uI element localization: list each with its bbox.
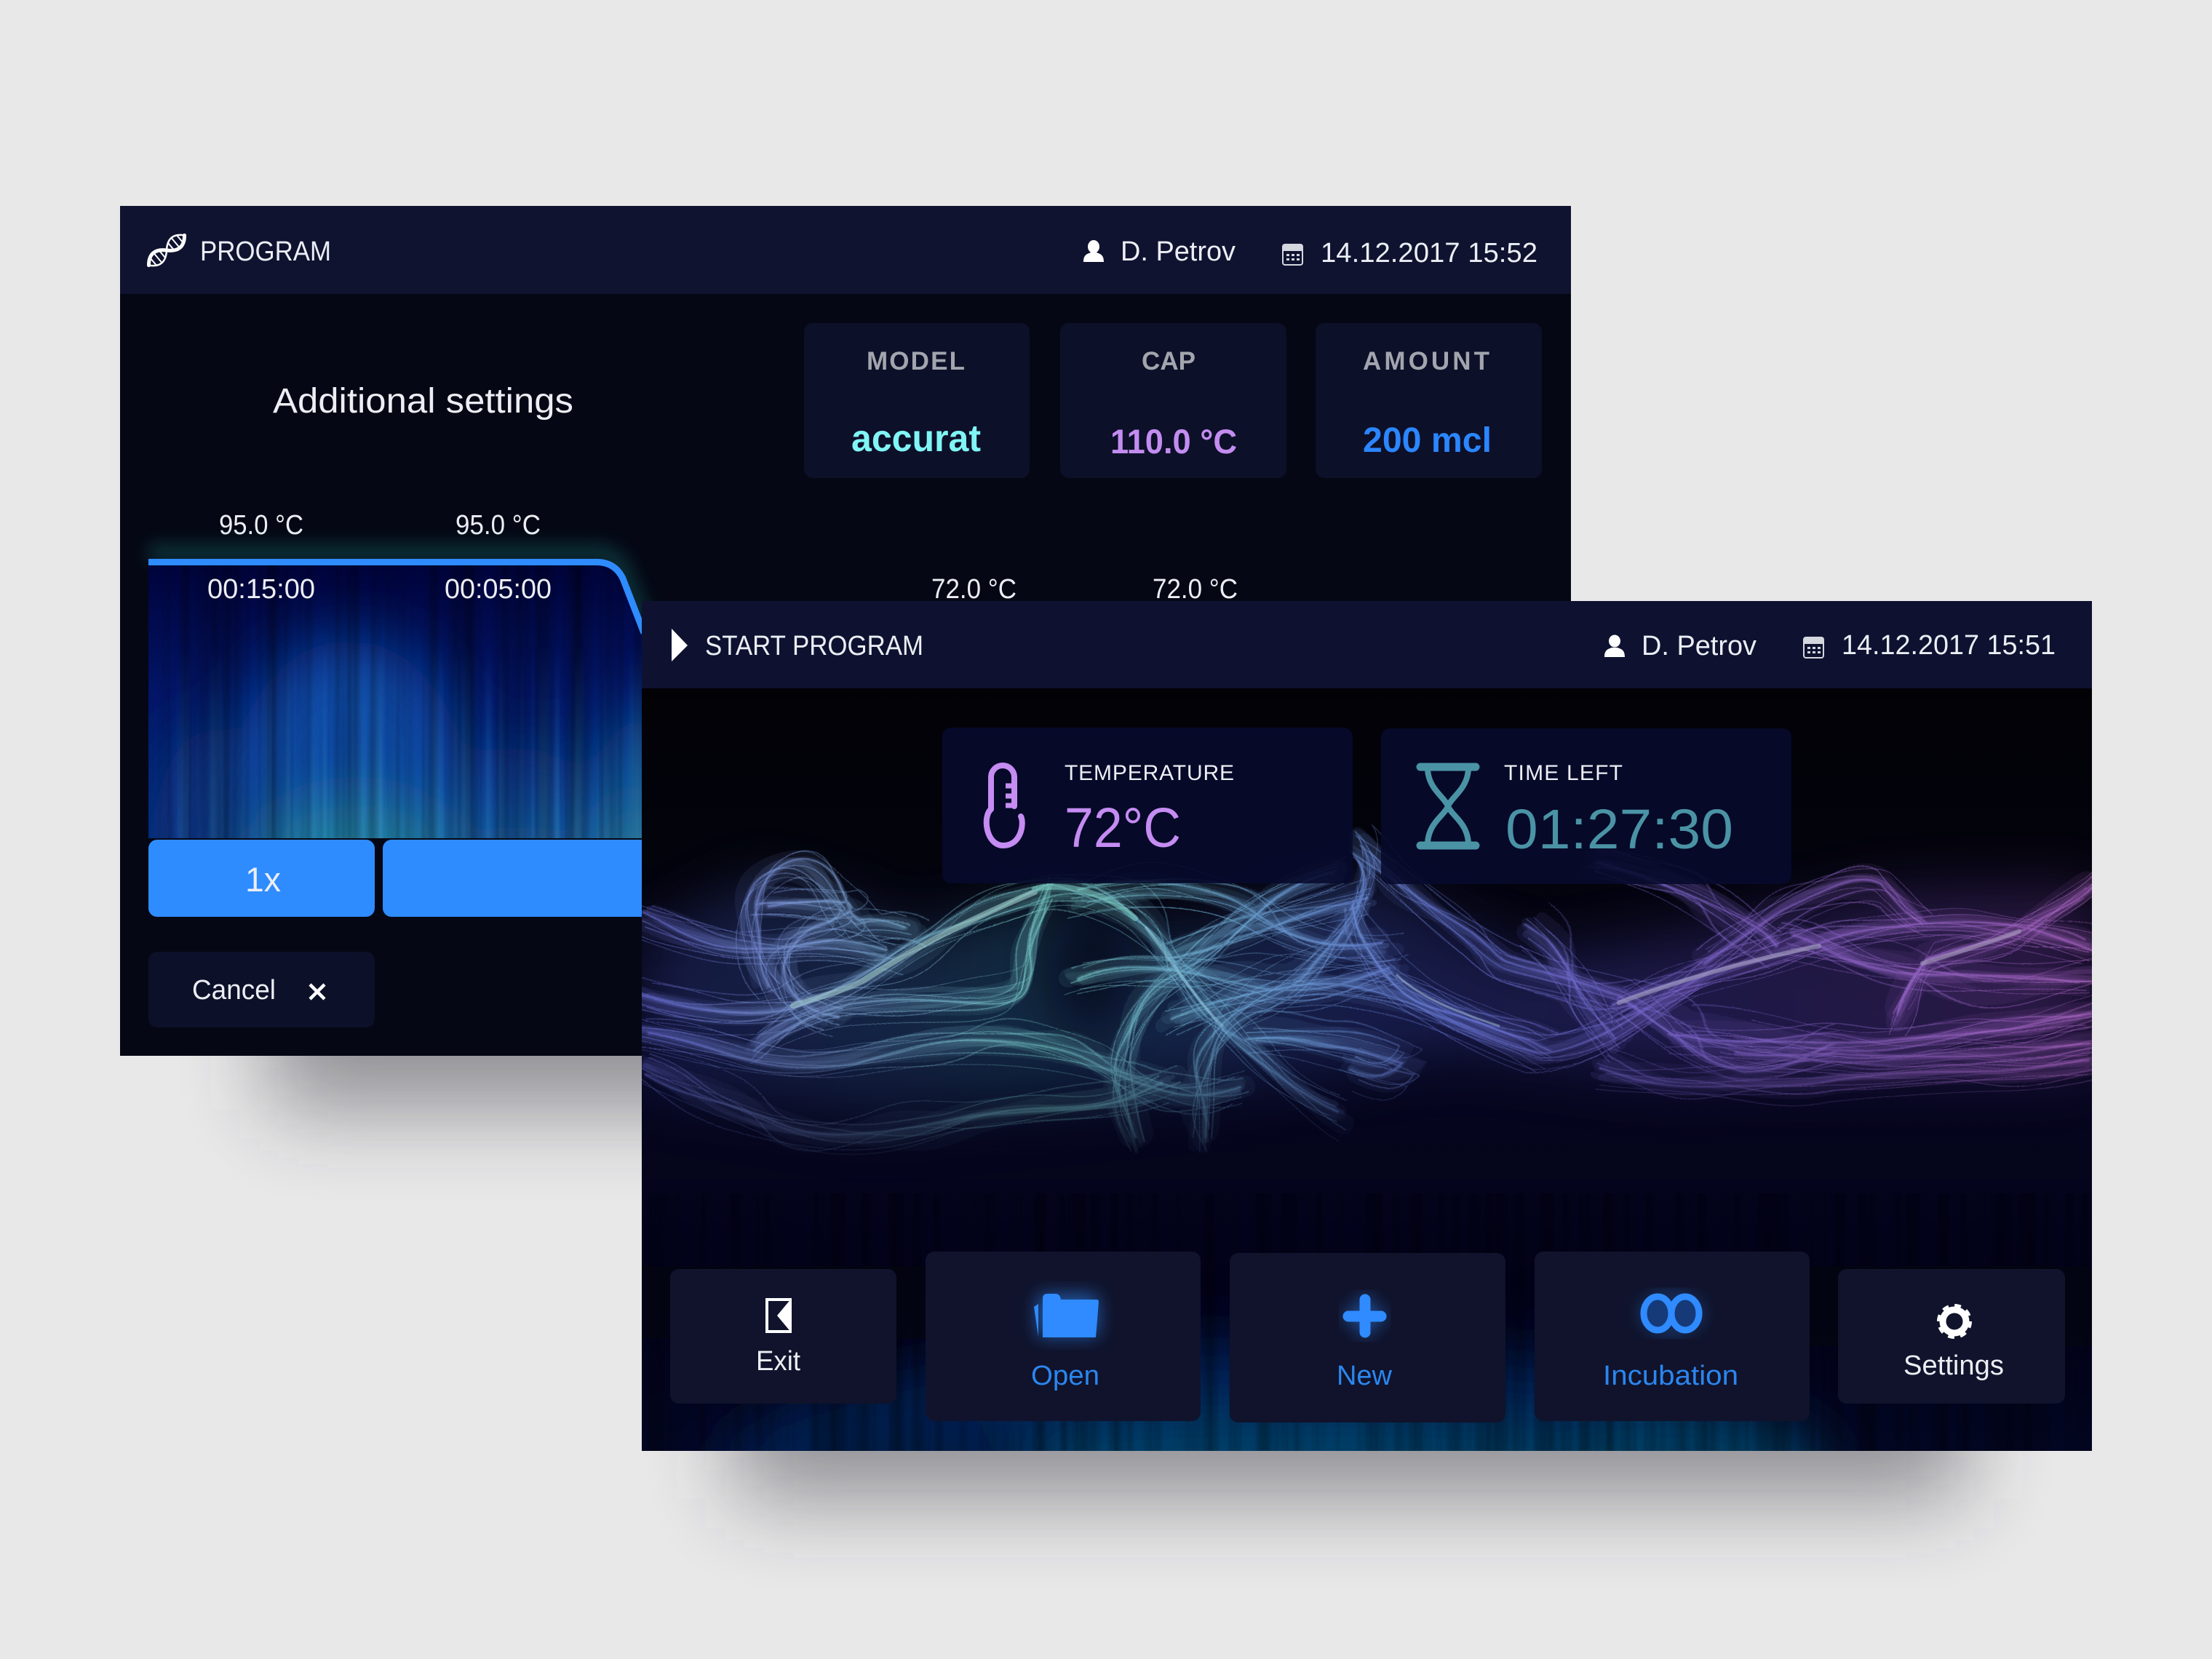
- label: time 00:15:00: 00:15:00: [207, 574, 315, 605]
- card: time left: 01:27:30: [1505, 798, 1733, 861]
- icon: folder: [1034, 1294, 1099, 1337]
- date and time: 14.12.2017 15:52: [1321, 238, 1537, 268]
- smoke artwork: [636, 831, 2099, 1179]
- icon: user: [1083, 240, 1104, 262]
- back panel shadow: [269, 655, 1470, 1110]
- button: 1x: 1x: [245, 860, 281, 899]
- icon: calendar: [1283, 244, 1302, 265]
- icon: dna helix: [145, 231, 188, 270]
- card: cap: CAP: [1142, 347, 1195, 375]
- icon: exit door: [767, 1298, 792, 1333]
- button: exit: [670, 1269, 896, 1404]
- button: open: Open: [1031, 1361, 1099, 1391]
- header bar: [120, 206, 1571, 294]
- card: temperature: [942, 728, 1353, 883]
- bottom aurora: [642, 1193, 2092, 1451]
- user name: D. Petrov: [1642, 631, 1757, 661]
- label: 95.0 C second: 95.0 °C: [455, 510, 541, 541]
- card: time left: TIME LEFT: [1504, 761, 1623, 785]
- button: incubation: Incubation: [1603, 1361, 1738, 1391]
- button: exit: Exit: [756, 1346, 800, 1377]
- label: 72.0 C second: 72.0 °C: [1153, 574, 1238, 605]
- card: time left: [1381, 728, 1791, 884]
- button: 1x: [148, 840, 375, 917]
- label: 95.0 C: 95.0 °C: [219, 510, 303, 541]
- icon: calendar: [1804, 637, 1823, 658]
- label: time 00:05:00: 00:05:00: [445, 574, 552, 605]
- card: temperature: TEMPERATURE: [1065, 761, 1234, 785]
- icon: user: [1604, 634, 1625, 657]
- icon: hourglass: [1420, 767, 1476, 846]
- header title: PROGRAM: [200, 236, 331, 267]
- label: 72.0 C: 72.0 °C: [931, 574, 1017, 605]
- header bar: [642, 601, 2092, 688]
- button: settings: Settings: [1903, 1350, 2004, 1381]
- date and time: 14.12.2017 15:51: [1842, 630, 2056, 661]
- card: amount: 200 mcl: [1363, 421, 1492, 460]
- icon: plus: [1348, 1300, 1381, 1332]
- button: new: New: [1337, 1361, 1393, 1391]
- chart: aurora temperature profile: [144, 538, 652, 838]
- icon: thermometer: [987, 765, 1022, 846]
- panel body: [642, 601, 2092, 1451]
- user name: D. Petrov: [1121, 236, 1236, 267]
- icon: infinity: [1644, 1297, 1699, 1330]
- button: second cycle: [383, 840, 674, 917]
- button: cancel: [148, 952, 375, 1027]
- card: model: MODEL: [867, 347, 965, 375]
- card: cap: [1060, 323, 1286, 478]
- icon: play triangle: [672, 629, 688, 661]
- heading: additional settings: Additional settings: [273, 382, 573, 421]
- card: model: [804, 323, 1030, 478]
- card: amount: AMOUNT: [1363, 347, 1489, 375]
- button: open: [926, 1252, 1201, 1421]
- card: temperature: 72°C: [1065, 797, 1181, 859]
- header title: START PROGRAM: [705, 631, 923, 661]
- button: cancel: Cancel: [192, 975, 276, 1006]
- icon: gear: [1939, 1306, 1970, 1337]
- panel: start program (front screen): [642, 601, 2092, 1451]
- button: settings: [1838, 1269, 2065, 1404]
- panel: program (back screen): [120, 206, 1571, 1056]
- front panel shadow: [735, 1091, 1965, 1499]
- chart line: [148, 562, 644, 633]
- button: incubation: [1535, 1252, 1810, 1421]
- panel body: [120, 206, 1571, 1056]
- card: amount: [1316, 323, 1542, 478]
- button: new: [1230, 1253, 1505, 1423]
- card: cap: 110.0 °C: [1110, 422, 1237, 461]
- card: model: accurat: [851, 418, 981, 460]
